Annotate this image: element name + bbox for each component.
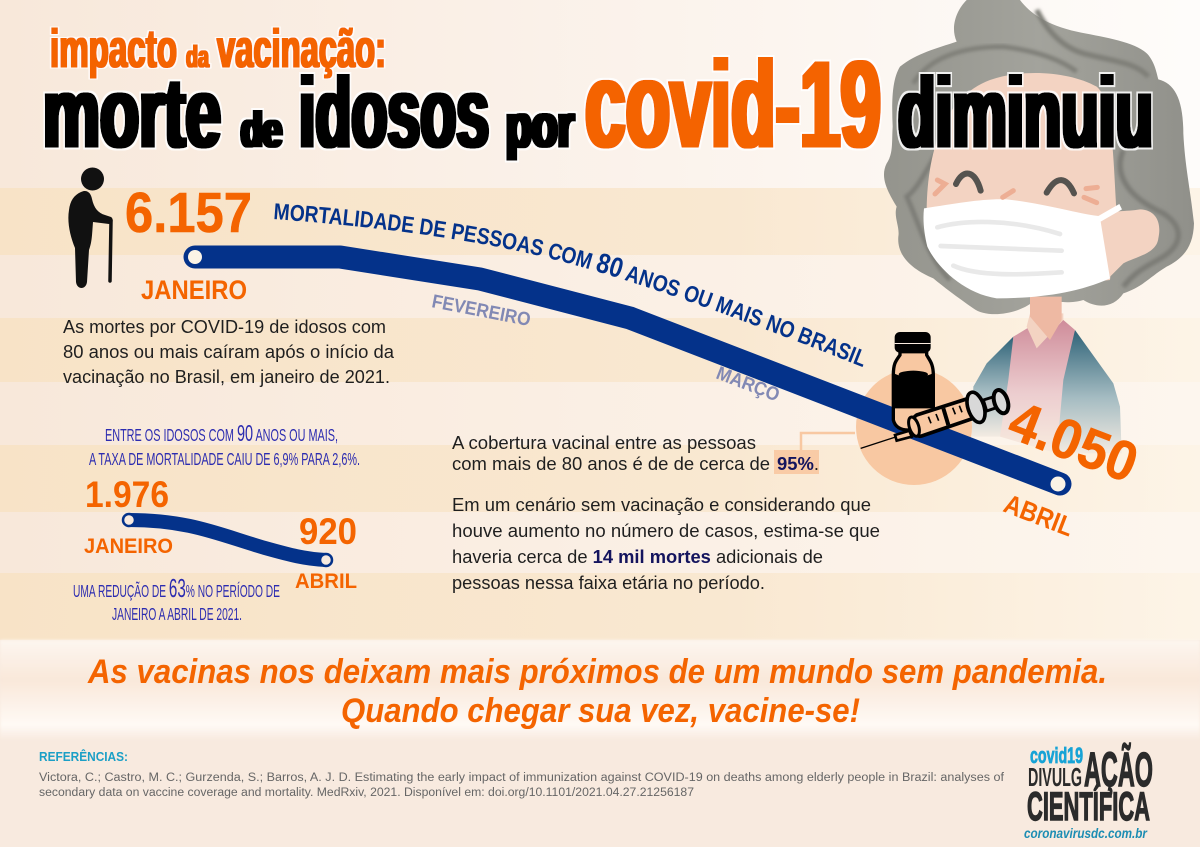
title line 2: morte de idosos por covid-19 diminuiu: covid-19 <box>585 37 881 174</box>
paragraph: no-vaccine scenario <box>452 495 880 593</box>
label Abril: ABRIL <box>295 570 357 593</box>
paragraph: death drop: As mortes por COVID-19 de idosos com <box>63 317 386 337</box>
icon: syringe <box>861 388 1011 448</box>
references: Victora, C.; Castro, M. C.; Gurzenda, S.; Barros, A. J. D. Estimating the early impact of immunization against COVID-19 on deaths among elderly people in Brazil: analyses of <box>39 772 1005 784</box>
February label: FEVEREIRO <box>430 291 532 331</box>
call to action: Quando chegar sua vez, vacine-se! <box>341 692 860 730</box>
value 1.976: 1.976 <box>85 474 169 515</box>
references: REFERÊNCIAS: <box>39 749 128 764</box>
references: secondary data on vaccine coverage and mortality. MedRxiv, 2021. Disponível em: doi.org/10.1101/2021.04.27.21256187 <box>39 787 694 799</box>
label Janeiro: JANEIRO <box>84 535 173 558</box>
paragraph: death drop: vacinação no Brasil, em janeiro de 2021. <box>63 367 390 387</box>
title line 1: impacto da vacinação: da <box>186 39 209 74</box>
logo: Covid19 DivulgAção Científica: covid19 <box>1030 743 1083 768</box>
paragraph: vaccine coverage: com mais de 80 anos é de de cerca de <box>452 454 770 474</box>
panel: 90 years or older <box>73 421 360 624</box>
paragraph: no-vaccine scenario: pessoas nessa faixa etária no período. <box>452 573 765 593</box>
chart heading on curve: MORTALIDADE DE PESSOAS COM 80 ANOS OU MAIS NO BRASIL <box>274 203 864 367</box>
title line 1: impacto da vacinação <box>50 19 386 79</box>
handwritten note bottom: JANEIRO A ABRIL DE 2021. <box>112 605 242 624</box>
illustration: elderly woman with mask <box>884 0 1194 453</box>
handwritten note bottom: UMA REDUÇÃO DE 63% NO PERÍODO DE <box>73 573 280 603</box>
call to action: As vacinas nos deixam mais próximos de um mundo sem pandemia. <box>87 653 1107 691</box>
paragraph: no-vaccine scenario: Em um cenário sem vacinação e considerando que <box>452 495 871 515</box>
title line 2: morte de idosos por covid-19 diminuiu: de <box>241 102 282 158</box>
handwritten note top: A TAXA DE MORTALIDADE CAIU DE 6,9% PARA 2,6%. <box>89 450 360 469</box>
vaccine accent circle and connector <box>801 369 972 485</box>
April value: 4.050 <box>1001 388 1147 495</box>
icon: vaccine vial <box>893 332 933 430</box>
paragraph: vaccine coverage: 95%. <box>777 454 819 474</box>
call to action <box>87 653 1107 730</box>
logo: Covid19 DivulgAção Científica <box>1024 742 1153 841</box>
title line 2: morte de idosos por covid-19 diminuiu <box>43 37 1153 174</box>
title line 2: morte de idosos por covid-19 diminuiu: morte <box>43 57 221 169</box>
March label: MARÇO <box>713 363 782 406</box>
value 920: 920 <box>299 511 357 552</box>
title line 2: morte de idosos por covid-19 diminuiu: idosos <box>299 57 489 169</box>
title <box>43 19 1153 174</box>
handwritten note top: ENTRE OS IDOSOS COM 90 ANOS OU MAIS, <box>105 421 338 447</box>
paragraph: no-vaccine scenario: haveria cerca de 14 mil mortes adicionais de <box>452 547 823 567</box>
title line 1: impacto da vacinação: vacinação: <box>217 19 386 79</box>
paragraph: vaccine coverage: A cobertura vacinal entre as pessoas <box>452 433 756 453</box>
paragraph: death drop <box>63 317 395 387</box>
April label: ABRIL <box>1000 489 1078 542</box>
title line 1: impacto da vacinação: impacto <box>50 19 177 79</box>
January label: JANEIRO <box>141 275 247 305</box>
logo: Covid19 DivulgAção Científica: coronavirusdc.com.br <box>1024 826 1148 841</box>
handwritten note top <box>89 421 360 469</box>
main line chart <box>188 250 1066 492</box>
woman body and jacket <box>972 313 1122 453</box>
paragraph: death drop: 80 anos ou mais caíram após o início da <box>63 342 395 362</box>
title line 2: morte de idosos por covid-19 diminuiu: por <box>506 92 574 161</box>
logo: Covid19 DivulgAção Científica: DIVULG <box>1028 762 1082 792</box>
paragraph: no-vaccine scenario: houve aumento no número de casos, estima-se que <box>452 521 880 541</box>
small line chart <box>123 514 332 566</box>
handwritten note bottom <box>73 573 280 624</box>
paragraph: vaccine coverage <box>452 433 819 474</box>
January value: 6.157 <box>125 181 252 245</box>
woman head and hair <box>884 0 1194 340</box>
references <box>39 749 1005 799</box>
icon: elderly person with cane <box>68 168 113 288</box>
